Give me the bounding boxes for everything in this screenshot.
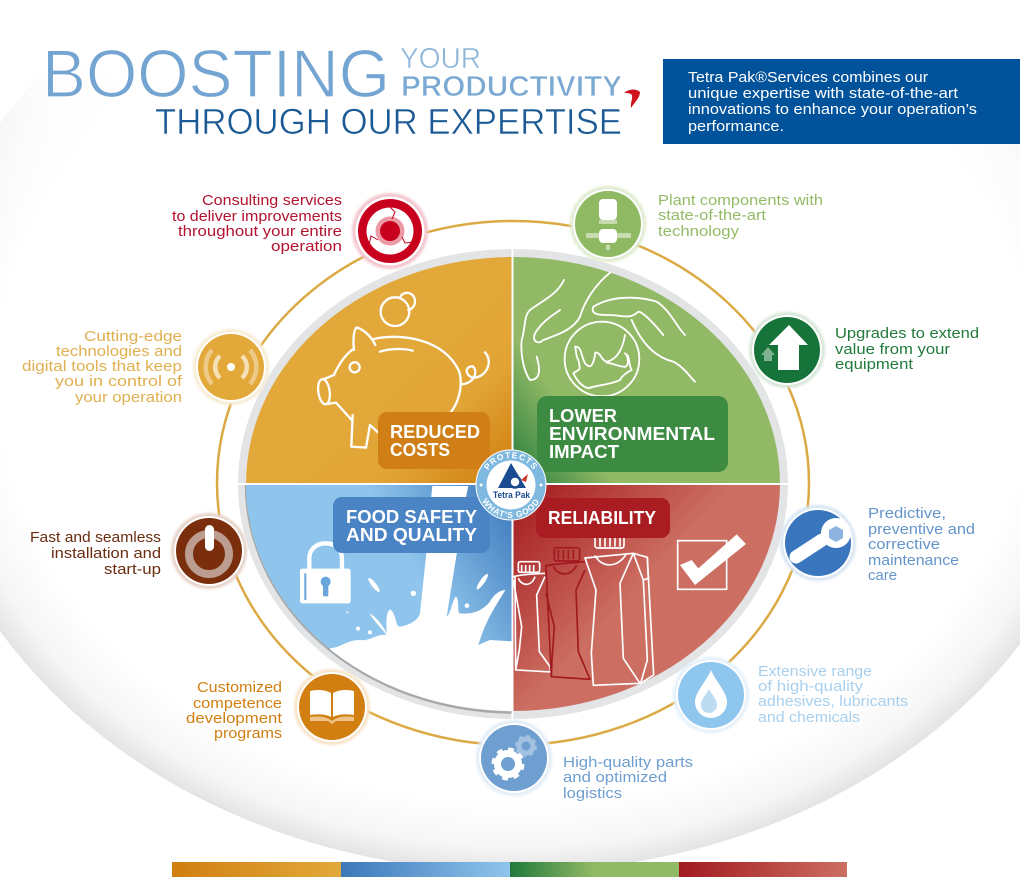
text: installation: installation and <box>51 546 161 562</box>
text: installation <box>30 530 161 578</box>
icon: power button <box>171 513 247 589</box>
text: maintenance: maintenance <box>868 553 959 569</box>
text: parts and logistics: High-quality parts <box>563 755 693 771</box>
panel: lower environmental impact <box>513 257 780 484</box>
gold ring connecting services <box>217 221 809 745</box>
text: maintenance <box>868 506 975 584</box>
text: upgrades: equipment <box>835 357 913 373</box>
text: digital tools <box>22 329 183 406</box>
center logo: Tetra Pak protects what's good <box>476 450 546 520</box>
intro callout: performance. <box>688 119 784 135</box>
icon: drop <box>673 657 749 733</box>
text: installation: Fast and seamless <box>30 530 161 546</box>
text: adhesives: Extensive range <box>758 664 872 680</box>
label: reliability: RELIABILITY <box>548 508 656 528</box>
text: parts and logistics <box>563 755 693 802</box>
text: competence programs: Customized <box>197 680 282 696</box>
text: upgrades <box>835 326 979 373</box>
text: competence programs: programs <box>214 726 282 742</box>
label: food safety and quality: FOOD SAFETY <box>346 507 477 527</box>
panel: food safety and quality <box>246 485 512 711</box>
text: digital tools: you in control of <box>55 374 183 390</box>
text: parts and logistics: logistics <box>563 786 622 802</box>
panel: reliability <box>513 484 780 711</box>
grey ring around pie <box>238 249 788 719</box>
text: digital tools: your operation <box>75 390 182 406</box>
text: competence programs: competence <box>193 696 282 712</box>
text: adhesives <box>758 664 908 726</box>
center logo: Tetra Pak protects what's good: Tetra Pak <box>493 490 531 501</box>
icon: carton packages <box>513 536 654 685</box>
title: THROUGH OUR EXPERTISE <box>155 101 622 142</box>
text: plant components: state-of-the-art <box>658 208 766 224</box>
intro callout: innovations to enhance your operation’s <box>688 102 977 118</box>
text: upgrades: Upgrades to extend <box>835 326 979 342</box>
text: adhesives: adhesives, lubricants <box>758 694 908 710</box>
panel: reduced costs <box>246 257 513 484</box>
text: consulting services <box>172 193 342 255</box>
text: installation: start-up <box>104 562 161 578</box>
intro callout: Tetra Pak®Services combines our <box>688 70 928 86</box>
text: plant components <box>658 193 823 240</box>
text: adhesives: and chemicals <box>758 710 860 726</box>
intro callout: unique expertise with state-of-the-art <box>688 86 958 102</box>
label: reduced costs: COSTS <box>390 440 450 460</box>
label: food safety and quality <box>333 497 490 553</box>
text: upgrades: value from your <box>835 342 950 358</box>
title: PRODUCTIVITY <box>401 71 622 103</box>
label: lower environmental impact: ENVIRONMENTAL <box>549 424 715 444</box>
text: parts and logistics: and optimized <box>563 770 667 786</box>
text: maintenance: corrective <box>868 537 940 553</box>
title <box>42 36 622 142</box>
icon: consulting target <box>352 193 428 269</box>
icon: book <box>294 669 370 745</box>
intro callout <box>663 59 1020 144</box>
label: reliability <box>536 498 670 538</box>
icon: red swoosh <box>624 90 640 108</box>
text: maintenance: care <box>868 568 897 584</box>
text: plant components: Plant components with <box>658 193 823 209</box>
icon: wireless signal <box>193 329 269 405</box>
text: digital tools: Cutting-edge <box>84 329 182 345</box>
text: maintenance: Predictive, <box>868 506 946 522</box>
icon: wrench <box>780 505 856 581</box>
icon: upgrade arrow <box>749 312 825 388</box>
text: competence programs: development <box>186 711 282 727</box>
text: digital tools: digital tools that keep <box>22 359 182 375</box>
icon: piggy bank <box>317 293 489 448</box>
label: lower environmental impact: LOWER <box>549 406 617 426</box>
label: reduced costs: REDUCED <box>390 422 480 442</box>
icon: milk splash <box>330 486 512 711</box>
icon: gears <box>476 720 552 796</box>
text: consulting services: to deliver improvements <box>172 209 342 225</box>
icon: check box <box>678 534 746 589</box>
title: BOOSTING <box>42 36 390 112</box>
bottom colour bar <box>172 862 847 877</box>
label: reduced costs <box>378 412 490 469</box>
text: maintenance: preventive and <box>868 522 975 538</box>
white quadrant dividers <box>236 247 790 722</box>
label: lower environmental impact <box>537 396 728 472</box>
icon: hands holding globe <box>521 273 695 396</box>
text: adhesives: of high-quality <box>758 679 864 695</box>
icon: padlock <box>300 543 351 603</box>
center logo: Tetra Pak protects what's good: WHAT’S GOOD <box>482 498 538 518</box>
label: lower environmental impact: IMPACT <box>549 442 619 462</box>
label: food safety and quality: AND QUALITY <box>346 525 477 545</box>
text: plant components: technology <box>658 224 740 240</box>
center logo: Tetra Pak protects what's good: PROTECTS <box>484 452 537 470</box>
text: consulting services: Consulting services <box>202 193 342 209</box>
text: digital tools: technologies and <box>56 344 182 360</box>
text: consulting services: operation <box>271 239 342 255</box>
text: competence programs <box>186 680 282 742</box>
title: YOUR <box>400 43 481 75</box>
icon: plant component <box>570 186 646 262</box>
text: consulting services: throughout your entire <box>178 224 342 240</box>
